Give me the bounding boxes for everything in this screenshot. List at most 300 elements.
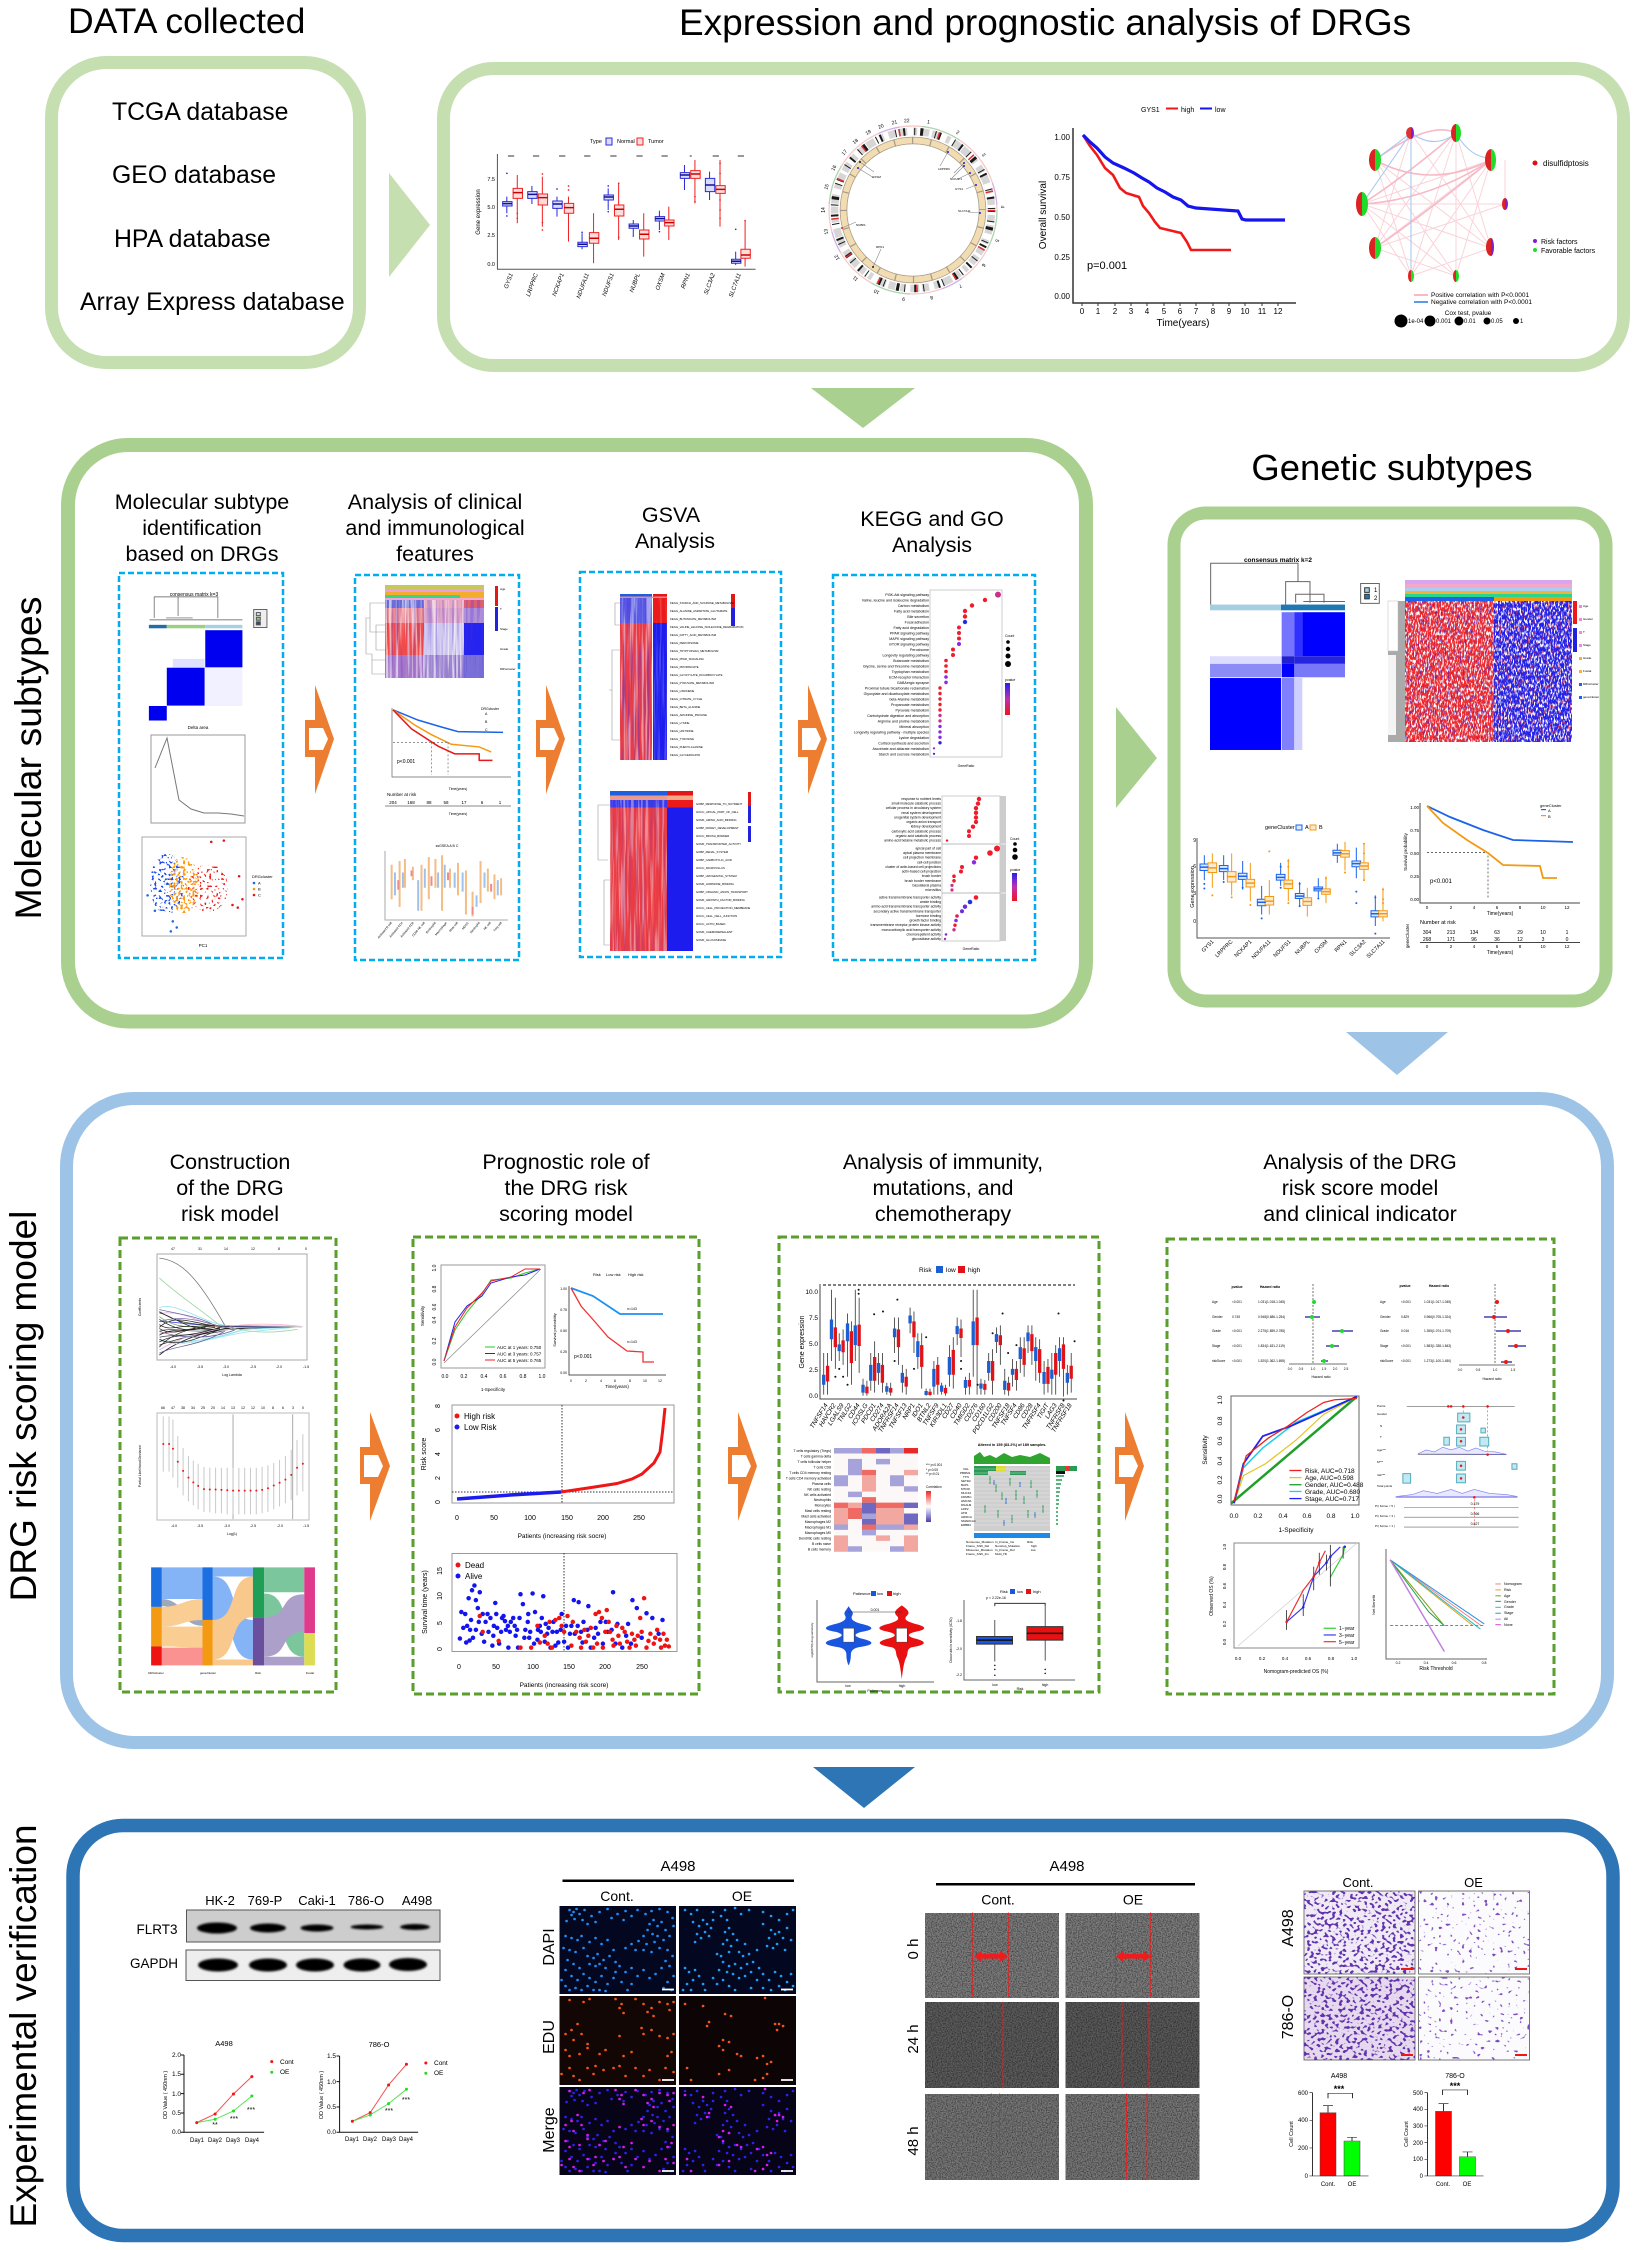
chart: circos plot: 13 <box>823 228 830 235</box>
chart: GO dot plot: cellular process in circulatory system <box>886 806 941 810</box>
chart: calibration curve: 3−year <box>1339 1633 1355 1639</box>
chart: ROC time-dependent: Sensitivity <box>420 1305 425 1326</box>
heading: risk score model and clinical indicator: and clinical indicator <box>1263 1202 1457 1226</box>
chart: risk score curve: 8 <box>435 1404 442 1408</box>
chart: LASSO cross validation: 38 <box>181 1406 185 1410</box>
chart: KEGG dot plot <box>854 590 1015 768</box>
chart: immune infiltration box plot <box>377 844 508 939</box>
chart: LASSO cross validation: 34 <box>191 1406 195 1410</box>
chart: KEGG dot plot: ECM-receptor interaction <box>889 676 929 680</box>
chart: LASSO cross validation: 6 <box>282 1406 284 1410</box>
chart: LASSO cross validation: 47 <box>171 1406 175 1410</box>
chart: gene cluster survival: 12 <box>1564 944 1570 949</box>
chart: KEGG dot plot: Glycine, serine and threonine metabolism <box>863 664 929 668</box>
chart: nomogram: Gender <box>1377 1412 1387 1416</box>
panel: molecular subtypes <box>68 445 1086 1022</box>
chart: LASSO coefficients: -2.5 <box>250 1365 256 1369</box>
chart: mutation oncoplot: ERBB4 <box>961 1523 971 1527</box>
chart: circos plot: 2 <box>955 130 960 136</box>
chart: A498 growth curve: OD Value ( 450nm ) <box>163 2071 169 2119</box>
chart: 786-O growth curve: Day3 <box>382 2137 397 2143</box>
panel: data collected <box>52 62 360 362</box>
chart: clinical ROC: Age, AUC=0.598 <box>1305 1475 1354 1482</box>
chart: GO dot plot: pvalue <box>1010 868 1020 872</box>
chart: GO dot plot: apical plasma membrane <box>903 851 941 855</box>
chart: risk group survival: n=143 <box>627 1307 637 1311</box>
chart: gene cluster heatmap: Gender <box>1583 617 1593 621</box>
chart: risk score curve: Patients (increasing risk socre) <box>518 1533 606 1540</box>
chart: DRG cluster survival: Number at risk <box>387 792 417 797</box>
chart: immune correlation heatmap: Correlation <box>926 1485 942 1489</box>
chart: univariate forest plot: Age <box>1212 1300 1218 1304</box>
chart: LASSO coefficients: Log Lambda <box>222 1373 242 1377</box>
figure: EdU fluorescence panel <box>541 1858 796 2175</box>
heading: immunity, mutations, chemotherapy: chemotherapy <box>875 1202 1011 1226</box>
chart: gene cluster heatmap: DRGcluster <box>1583 682 1599 686</box>
chart: LASSO coefficients: -2.0 <box>276 1365 282 1369</box>
chart: ROC time-dependent: 0.6 <box>432 1303 438 1310</box>
chart: gene cluster survival: 10 <box>1540 905 1546 910</box>
heading: clinical and immunological features: Analysis of clinical <box>348 490 522 514</box>
chart: KEGG dot plot: Tryptophan metabolism <box>892 670 929 674</box>
chart: DRG expression box plot: 2.5 <box>487 233 495 239</box>
chart: immune checkpoint box plot: 2.5 <box>809 1367 818 1374</box>
chart: decision curve: 0.6 <box>1452 1661 1456 1665</box>
figure: EdU fluorescence panel: DAPI <box>541 1928 558 1966</box>
chart: GO dot plot: renal system development <box>901 811 941 815</box>
chart: immune checkpoint box plot: TNFSF13 <box>888 1402 909 1430</box>
chart: immune checkpoint box plot: PDCD1 <box>860 1402 878 1425</box>
chart: immune checkpoint box plot: CD86 <box>1012 1402 1027 1420</box>
arrow: orange step 2 <box>536 685 565 794</box>
chart: 786-O growth curve: 0.0 <box>327 2129 336 2136</box>
chart: drug sensitivity box plot: -1.8 <box>956 1619 962 1623</box>
chart: ROC time-dependent: 0.6 <box>500 1374 507 1380</box>
chart: risk group survival: 0 <box>570 1379 572 1383</box>
arrow: molecular to genetic subtypes <box>1116 707 1157 808</box>
chart: 786-O growth curve: *** <box>385 2108 393 2115</box>
chart: GYS1 survival curve: 4 <box>1145 307 1150 316</box>
chart: risk group survival: High risk <box>628 1272 644 1277</box>
chart: calibration curve: 0.2 <box>1222 1620 1227 1627</box>
chart: ROC time-dependent: 1-Specificity <box>481 1387 506 1392</box>
chart: GO dot plot: basolateral plasma <box>913 883 941 887</box>
chart: GSVA heatmap A: KEGG_TYROSINE <box>670 737 694 741</box>
chart: nomogram: Points <box>1377 1404 1386 1408</box>
chart: multivariate forest plot: Hazard ratio <box>1429 1284 1449 1288</box>
chart: nomogram: M*** <box>1377 1460 1384 1464</box>
chart: univariate forest plot: 2.5 <box>1344 1367 1348 1371</box>
chart: GSVA heatmap B: GOMF_HORMONE_BINDING <box>696 882 734 886</box>
figure: wound healing panel: Cont. <box>981 1892 1015 1908</box>
chart: GO dot plot: active transmembrane transporter activity <box>879 896 941 900</box>
chart: LASSO cross validation: 14 <box>221 1406 225 1410</box>
chart: DRG expression box plot: Type <box>590 139 602 145</box>
chart: multivariate forest plot: Grade <box>1380 1329 1389 1333</box>
chart: univariate forest plot: <0.001 <box>1232 1359 1242 1363</box>
chart: DRG cluster survival: C <box>485 728 488 732</box>
chart: A498 growth curve: 1.5 <box>172 2071 181 2078</box>
figure: wound healing panel <box>905 1858 1200 2180</box>
chart: GYS1 survival curve: 7 <box>1194 307 1199 316</box>
chart: correlation network: 1e-04 <box>1408 319 1424 325</box>
chart: risk group survival: 0.00 <box>560 1371 567 1375</box>
figure: western blot: GAPDH <box>130 1956 178 1971</box>
chart: GO dot plot: cluster of actin-based cell projections <box>885 865 941 869</box>
chart: risk group survival: Risk <box>593 1272 601 1277</box>
chart: ROC time-dependent: 0.2 <box>432 1337 438 1344</box>
chart: drug sensitivity box plot: low <box>1017 1589 1023 1594</box>
chart: ROC time-dependent <box>420 1264 546 1392</box>
chart: GSVA heatmap B: GOBP_ORGANIC_ANION_TRANSPORT <box>696 890 748 894</box>
chart: LASSO cross validation: 25 <box>201 1406 205 1410</box>
chart: gene cluster survival: Survival probability <box>1403 832 1408 871</box>
figure: EdU fluorescence panel: OE <box>732 1888 752 1904</box>
chart: KEGG dot plot: pvalue <box>1005 678 1015 682</box>
heading: construction of the DRG risk model: Construction <box>170 1150 290 1174</box>
chart: decision curve: Age <box>1504 1594 1510 1598</box>
chart: immune infiltration box plot: Macrophage <box>434 921 448 936</box>
chart: GYS1 survival curve: high <box>1181 107 1194 114</box>
chart: mutation oncoplot: Altered in 159 (83.2%) of 189 samples. <box>978 1443 1046 1447</box>
chart: A498 growth curve: ** <box>212 2122 218 2129</box>
chart: GO dot plot: GeneRatio <box>963 947 979 951</box>
chart: gene cluster survival: 8 <box>1519 905 1522 910</box>
chart: PCA scatter: A <box>258 880 261 886</box>
chart: GSVA heatmap A: KEGG_PEROXISOME <box>670 641 699 645</box>
chart: GYS1 survival curve: 8 <box>1211 307 1216 316</box>
chart: univariate forest plot: 1.0 <box>1311 1367 1315 1371</box>
chart: gene cluster survival: 12 <box>1517 937 1523 943</box>
text: database list: HPA database <box>114 226 271 253</box>
chart: multivariate forest plot: 1.0 <box>1493 1368 1497 1372</box>
chart: GYS1 survival curve: 0.25 <box>1054 253 1071 262</box>
chart: risk group survival: 4 <box>600 1379 602 1383</box>
chart: gene cluster survival: Time(years) <box>1487 911 1514 917</box>
chart: LASSO cross validation: 20 <box>211 1406 215 1410</box>
chart: gene cluster survival: 96 <box>1471 937 1477 943</box>
chart: correlation network: 0.05 <box>1491 319 1503 325</box>
chart: drug sensitivity box plot: high <box>1042 1683 1048 1687</box>
chart: calibration curve: 0.6 <box>1222 1582 1227 1589</box>
chart: GSVA heatmap A: KEGG_LIMONENE <box>670 689 694 693</box>
dashed panel: KEGG and GO <box>833 575 1035 960</box>
chart: univariate forest plot: <0.001 <box>1232 1344 1242 1348</box>
chart: gene cluster survival: 8 <box>1519 944 1522 949</box>
chart: mutation oncoplot: Missense_Mutation <box>966 1548 993 1552</box>
chart: sankey diagram: Fustat <box>306 1671 314 1675</box>
chart: gene cluster box plot: RPN1 <box>1334 939 1348 954</box>
chart: univariate forest plot: <0.001 <box>1232 1300 1242 1304</box>
chart: immune checkpoint box plot: 7.5 <box>809 1315 818 1322</box>
chart: GO dot plot: transmembrane receptor protein kinase activity <box>871 923 941 927</box>
chart: survival status scatter: 0 <box>437 1647 444 1651</box>
figure: western blot: HK-2 <box>205 1893 235 1908</box>
chart: LASSO coefficients: -4.0 <box>170 1365 176 1369</box>
chart: immune correlation heatmap: Macrophages M2 <box>805 1520 831 1524</box>
chart: gene cluster box plot: SLC7A11 <box>1366 939 1386 960</box>
chart: risk group survival: Survival probability <box>552 1313 557 1347</box>
chart: mutation oncoplot: Multi_Hit <box>995 1552 1007 1556</box>
chart: calibration curve: 0.6 <box>1305 1656 1312 1661</box>
chart: risk score curve: 250 <box>633 1515 645 1522</box>
chart: gene cluster box plot: NDUFA11 <box>1251 939 1272 961</box>
chart: survival status scatter: Dead <box>465 1561 484 1570</box>
chart: circos plot: 14 <box>821 207 827 213</box>
chart: risk score curve: 50 <box>490 1515 498 1522</box>
chart: circos plot: SLC7A11 <box>958 209 971 213</box>
chart: clinical heatmap: DRGcluster <box>500 667 516 671</box>
chart: immune checkpoint box plot: CD28 <box>1020 1402 1035 1420</box>
chart: multivariate forest plot: Stage <box>1380 1344 1389 1348</box>
chart: KEGG dot plot: Carbohydrate digestion and absorption <box>867 714 929 718</box>
chart: A498 cell count bars: 200 <box>1298 2146 1309 2152</box>
chart: GYS1 survival curve: 12 <box>1274 307 1283 316</box>
chart: gene cluster survival: 0 <box>1426 905 1429 910</box>
chart: immune correlation heatmap: T cells CD8 <box>814 1466 831 1470</box>
chart: circos plot: 4 <box>999 205 1005 209</box>
chart: correlation network: 0.01 <box>1464 319 1476 325</box>
chart: GSVA heatmap A: KEGG_LYSINE <box>670 721 690 725</box>
chart: multivariate forest plot: 1.5 <box>1511 1368 1515 1372</box>
chart: nomogram: Total points <box>1377 1484 1393 1488</box>
chart: LASSO cross validation <box>138 1406 309 1536</box>
chart: DRG cluster survival: 58 <box>443 800 449 805</box>
chart: LASSO coefficients: Coefficients <box>138 1298 142 1316</box>
chart: immune correlation heatmap: T cells regulatory (Tregs) <box>794 1449 831 1453</box>
chart: ROC time-dependent: 1.0 <box>539 1374 546 1380</box>
chart: gene cluster survival: 10 <box>1540 944 1546 949</box>
chart: immune checkpoint box plot: NRP1 <box>902 1402 917 1421</box>
chart: nomogram: 0.566 <box>1471 1512 1479 1516</box>
chart: calibration curve: 0.8 <box>1222 1563 1227 1570</box>
arrow: orange step 1 <box>305 685 334 794</box>
chart: univariate forest plot: Hazard ratio <box>1311 1375 1331 1379</box>
chart: LASSO coefficients <box>138 1247 309 1377</box>
chart: DRG expression box plot: 0.0 <box>487 262 495 268</box>
heading: GSVA analysis: Analysis <box>635 529 715 553</box>
chart: immune checkpoint box plot: CD160 <box>971 1402 988 1423</box>
chart: A498 growth curve: 2.0 <box>172 2052 181 2059</box>
chart: univariate forest plot: 0.948(0.686-1.254) <box>1258 1315 1285 1319</box>
chart: immune checkpoint box plot <box>799 1266 1077 1435</box>
chart: gene cluster heatmap: Age <box>1583 604 1589 608</box>
chart: gene cluster survival: 12 <box>1564 905 1570 910</box>
chart: circos plot: 11 <box>852 274 860 282</box>
chart: GSVA heatmap A: KEGG_STARCH_AND_SUCROSE_METABOLISM <box>670 601 734 605</box>
heading: KEGG and GO analysis: Analysis <box>892 533 972 557</box>
chart: gene cluster box plot: OXSM <box>1314 939 1330 955</box>
chart: GYS1 survival curve: p=0.001 <box>1087 260 1127 272</box>
chart: DRG expression box plot: NCKAP1 <box>552 273 566 297</box>
chart: immune checkpoint box plot: ICOSLG <box>851 1402 870 1427</box>
chart: circos plot: 16 <box>830 164 838 172</box>
chart: 786-O cell count bars: 500 <box>1413 2091 1424 2097</box>
chart: risk score curve: 100 <box>524 1515 536 1522</box>
chart: gene cluster box plot: NCKAP1 <box>1234 939 1253 959</box>
panel: experimental verification <box>73 1826 1613 2236</box>
chart: KEGG dot plot: Cortisol synthesis and secretion <box>878 742 929 746</box>
figure: transwell panel: Cont. <box>1342 1875 1374 1890</box>
chart: KEGG dot plot: Peroxisome <box>910 648 929 652</box>
chart: GSVA heatmap B: GOBP_UROGENITAL_SYSTEM <box>696 874 737 878</box>
chart: LASSO coefficients: -1.5 <box>303 1365 309 1369</box>
chart: violin plot by risk: high <box>893 1591 901 1596</box>
chart: risk score curve: High risk <box>464 1412 496 1421</box>
figure: wound healing panel: 0 h <box>905 1939 922 1959</box>
chart: mutation oncoplot: PBRM1 <box>960 1471 971 1475</box>
chart: LASSO coefficients: 47 <box>171 1247 175 1251</box>
chart: survival status scatter: 0 <box>457 1664 461 1671</box>
chart: GSVA heatmap A: KEGG_ARGININE_PROLINE <box>670 713 707 717</box>
chart: KEGG dot plot: Carbon metabolism <box>898 604 929 608</box>
chart: immune correlation heatmap: Mast cells activated <box>801 1515 831 1519</box>
chart: GSVA heatmap B: GOMF_CHEMOREPELLENT <box>696 930 733 934</box>
chart: delta area <box>151 725 245 823</box>
chart: 786-O cell count bars: OE <box>1463 2182 1471 2188</box>
chart: GSVA heatmap B: GOCC_BRUSH_BORDER <box>696 834 729 838</box>
chart: gene cluster survival: 36 <box>1494 937 1500 943</box>
chart: univariate forest plot: <0.001 <box>1232 1329 1242 1333</box>
chart: multivariate forest plot: 1.031(1.017-1.045) <box>1424 1300 1451 1304</box>
chart: GO dot plot: amino-acid betaine metabolic process <box>884 839 941 843</box>
chart: GYS1 survival curve: 1 <box>1096 307 1101 316</box>
chart: circos plot: 10 <box>873 287 881 295</box>
arrow: orange risk step 3 <box>1115 1412 1144 1521</box>
chart: correlation network: 1 <box>1520 319 1524 325</box>
chart: ROC time-dependent: 0.2 <box>461 1374 468 1380</box>
chart: 786-O cell count bars: 786-O <box>1445 2073 1465 2080</box>
chart: gene cluster heatmap: Grade <box>1583 656 1592 660</box>
chart: 786-O cell count bars <box>1404 2073 1484 2188</box>
heading: risk score model and clinical indicator: risk score model <box>1282 1176 1438 1200</box>
chart: immune infiltration box plot: CD56 NK cell <box>411 921 426 937</box>
chart: immune checkpoint box plot: 0.0 <box>809 1393 818 1400</box>
chart: LASSO cross validation: Log(λ) <box>227 1532 237 1536</box>
chart: nomogram: N <box>1380 1424 1382 1428</box>
heading: construction of the DRG risk model: of the DRG <box>176 1176 284 1200</box>
vertical heading: Experimental verification: Experimental verification <box>3 1824 44 2228</box>
chart: GYS1 survival curve: 5 <box>1162 307 1167 316</box>
chart: gene cluster survival: 0.25 <box>1410 874 1419 879</box>
chart: immune correlation heatmap: Macrophages M0 <box>805 1531 831 1535</box>
chart: risk group survival: 0.25 <box>560 1350 567 1354</box>
chart: immune correlation heatmap: Mast cells resting <box>805 1509 831 1513</box>
chart: ROC time-dependent: 0.8 <box>432 1285 438 1292</box>
chart: calibration curve: 0.8 <box>1328 1656 1335 1661</box>
heading: molecular subtype identification: Molecular subtype <box>115 490 289 514</box>
chart: ROC time-dependent: 0.4 <box>432 1316 438 1323</box>
chart: clinical heatmap: Grade <box>500 647 509 651</box>
chart: immune correlation heatmap: NK cells activated <box>804 1493 831 1497</box>
chart: gene cluster box plot <box>1190 825 1390 961</box>
vertical heading: DRG risk scoring model: DRG risk scoring model <box>3 1211 44 1601</box>
chart: clinical heatmap: Age <box>500 587 506 591</box>
chart: GSVA heatmap A: KEGG_HISTIDINE <box>670 729 694 733</box>
chart: circos plot: 6 <box>980 262 986 268</box>
chart: correlation network: disulfidptosis <box>1543 159 1589 168</box>
chart: multivariate forest plot: 1.355(1.074-1.709) <box>1424 1329 1451 1333</box>
chart: mutation oncoplot: BAP1 <box>961 1483 969 1487</box>
chart: circos plot: LRPPRC <box>938 167 951 171</box>
chart: circos plot: 17 <box>841 149 849 157</box>
chart: LASSO coefficients: -3.5 <box>197 1365 203 1369</box>
chart: immune checkpoint box plot: TNFSF4 <box>1000 1402 1019 1427</box>
chart: 786-O growth curve: OD Value ( 450nm ) <box>319 2071 325 2119</box>
chart: 786-O cell count bars: 400 <box>1413 2107 1424 2113</box>
chart: gene cluster survival: 29 <box>1517 930 1523 936</box>
chart: DRG cluster survival: 17 <box>461 800 467 805</box>
chart: KEGG dot plot: Glyoxylate and dicarboxylate metabolism <box>864 692 929 696</box>
chart: multivariate forest plot: 0.0 <box>1458 1368 1462 1372</box>
chart: GO dot plot: organic anion transport <box>906 820 941 824</box>
chart: calibration curve: 5−year <box>1339 1640 1355 1646</box>
chart: A498 cell count bars: A498 <box>1331 2073 1347 2080</box>
chart: DRG cluster survival: A <box>485 712 488 716</box>
chart: multivariate forest plot <box>1380 1284 1526 1381</box>
chart: gene cluster box plot: 3 <box>1193 891 1196 897</box>
chart: mutation oncoplot: In_Frame_Ins <box>995 1540 1015 1544</box>
chart: risk score curve: 150 <box>561 1515 573 1522</box>
panel: expression and prognostic analysis <box>444 68 1624 366</box>
chart: gene cluster survival: 0.50 <box>1410 851 1419 856</box>
chart: KEGG dot plot: Longevity regulating pathway - multiple species <box>854 730 929 734</box>
chart: gene cluster survival: 213 <box>1447 930 1455 936</box>
chart: LASSO cross validation: 12 <box>251 1406 255 1410</box>
chart: immune correlation heatmap: Macrophages M1 <box>805 1526 831 1530</box>
chart: risk score curve: 4 <box>435 1452 442 1456</box>
chart: immune infiltration box plot: MDSC <box>461 920 470 930</box>
chart: risk score curve: Risk score <box>421 1438 428 1470</box>
chart: immune correlation heatmap: B cells naive <box>812 1542 831 1546</box>
chart: A498 growth curve: A498 <box>215 2039 233 2048</box>
chart: mutation oncoplot: MTOR <box>961 1487 971 1491</box>
dashed panel: risk score and clinical indicator <box>1167 1239 1554 1694</box>
heading: risk score model and clinical indicator: Analysis of the DRG <box>1263 1150 1457 1174</box>
chart: A498 cell count bars: *** <box>1334 2084 1345 2094</box>
chart: GSVA heatmap B: GOCC_CELL_CELL_JUNCTION <box>696 914 737 918</box>
chart: immune correlation heatmap: ** p<0.01 <box>926 1472 939 1476</box>
chart: univariate forest plot: 0.0 <box>1288 1367 1292 1371</box>
chart: clinical ROC: 0.4 <box>1217 1456 1224 1466</box>
text: database list: TCGA database <box>112 99 288 126</box>
chart: correlation network: Negative correlation with P<0.0001 <box>1431 299 1532 306</box>
chart: GSVA heatmap A: KEGG_PYRUVATE_METABOLISM <box>670 681 715 685</box>
chart: LASSO cross validation: 3 <box>292 1406 294 1410</box>
chart: circos plot: 19 <box>865 129 873 137</box>
chart: LASSO coefficients: -3.0 <box>223 1365 229 1369</box>
chart: immune checkpoint box plot: TNFRSF18 <box>1050 1402 1074 1434</box>
chart: clinical ROC: 1-Specificity <box>1278 1527 1314 1534</box>
chart: circos plot: 3 <box>980 152 986 158</box>
chart: GSVA heatmap B: GOMF_GROWTH_FACTOR_BINDING <box>696 898 745 902</box>
chart: gene cluster box plot: LRPPRC <box>1214 939 1234 959</box>
chart: LASSO cross validation: -2.5 <box>250 1524 256 1528</box>
chart: gene cluster survival: 2 <box>1450 905 1453 910</box>
chart: DRG expression box plot: 5.0 <box>487 205 495 211</box>
chart: GSVA heatmap B: GOCC_ACTIN_BASED <box>696 922 725 926</box>
chart: gene cluster survival: 1 <box>1566 930 1569 936</box>
chart: survival status scatter: 250 <box>636 1664 648 1671</box>
chart: multivariate forest plot: 0.966(0.705-1.324) <box>1424 1315 1451 1319</box>
chart: 786-O growth curve: OE <box>434 2070 444 2077</box>
chart: GO dot plot: brush border membrane <box>905 879 941 883</box>
chart: PCA scatter: PC1 <box>199 943 208 948</box>
chart: clinical ROC: 0.2 <box>1217 1475 1224 1485</box>
chart: circos plot: 1 <box>927 119 931 126</box>
chart: nomogram: Pr( futime < 3 ) <box>1375 1514 1395 1518</box>
chart: GO dot plot: chemorepellent activity <box>906 932 941 936</box>
